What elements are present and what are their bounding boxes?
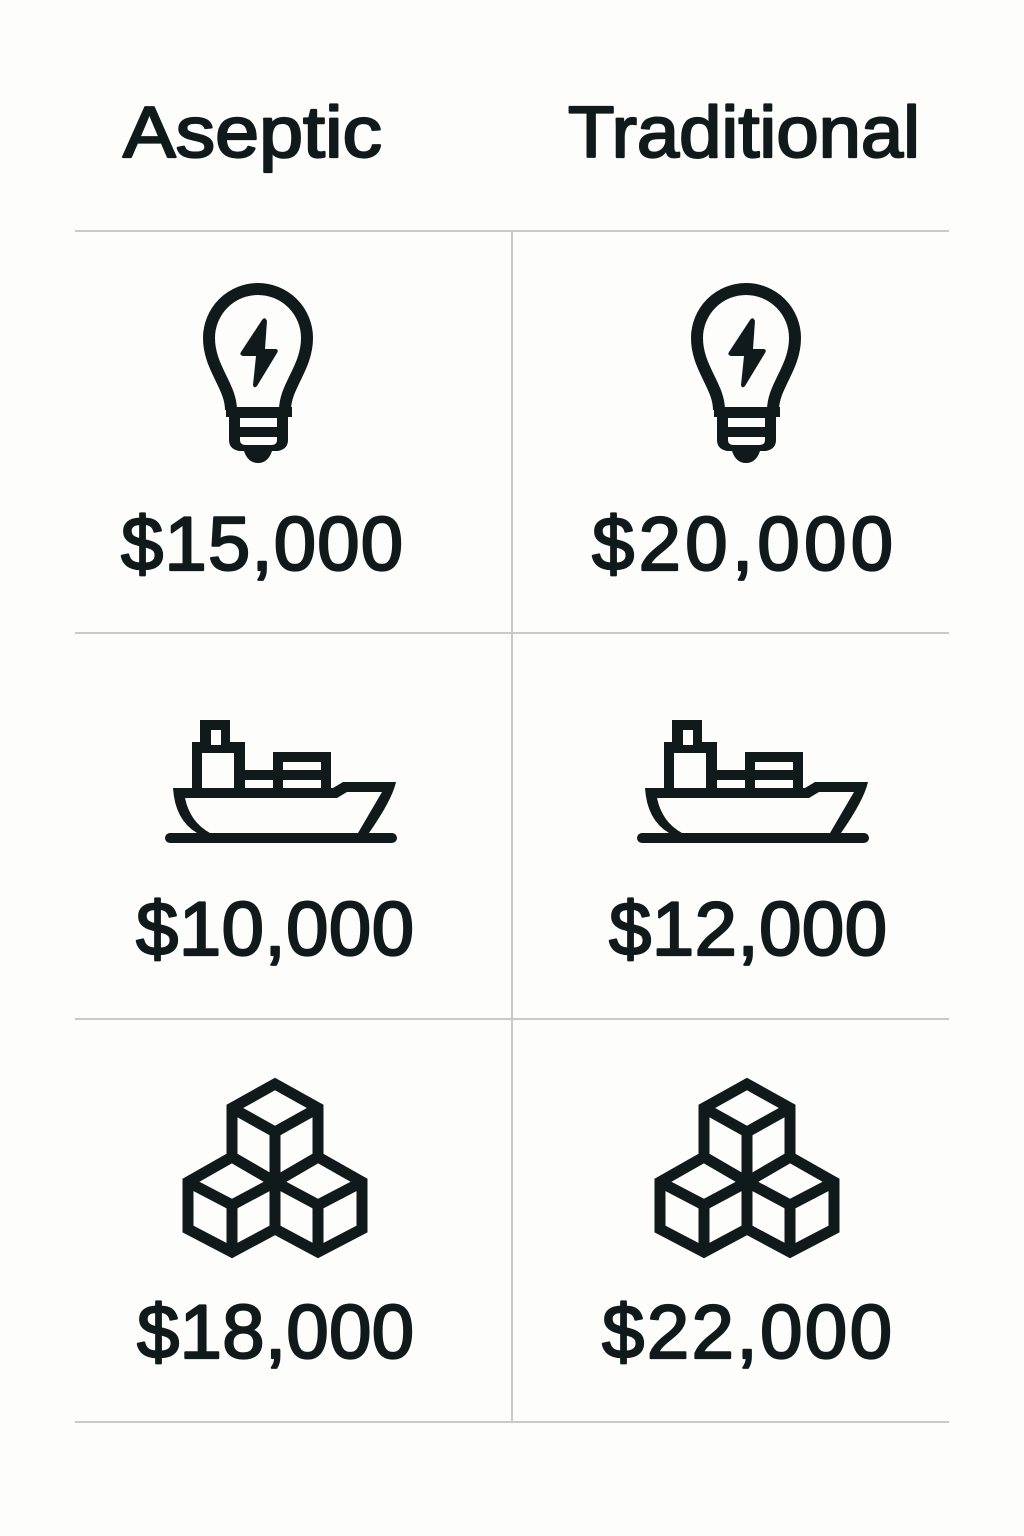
value: $15,000: $15,000	[121, 502, 403, 587]
icon: cubes, aseptic	[188, 1084, 362, 1252]
value: $22,000: $22,000	[602, 1290, 892, 1375]
icon: ship, aseptic	[165, 720, 397, 843]
value: $10,000: $10,000	[136, 887, 414, 972]
icon: cubes, traditional	[660, 1084, 834, 1252]
icon: ship, traditional	[637, 720, 869, 843]
icon: light bulb, traditional	[697, 289, 795, 463]
heading: Traditional: Traditional	[568, 93, 920, 173]
heading: Aseptic: Aseptic	[123, 93, 382, 173]
icon: light bulb, aseptic	[209, 289, 307, 463]
value: $12,000: $12,000	[609, 887, 887, 972]
value: $18,000: $18,000	[137, 1290, 414, 1375]
value: $20,000: $20,000	[592, 502, 893, 587]
